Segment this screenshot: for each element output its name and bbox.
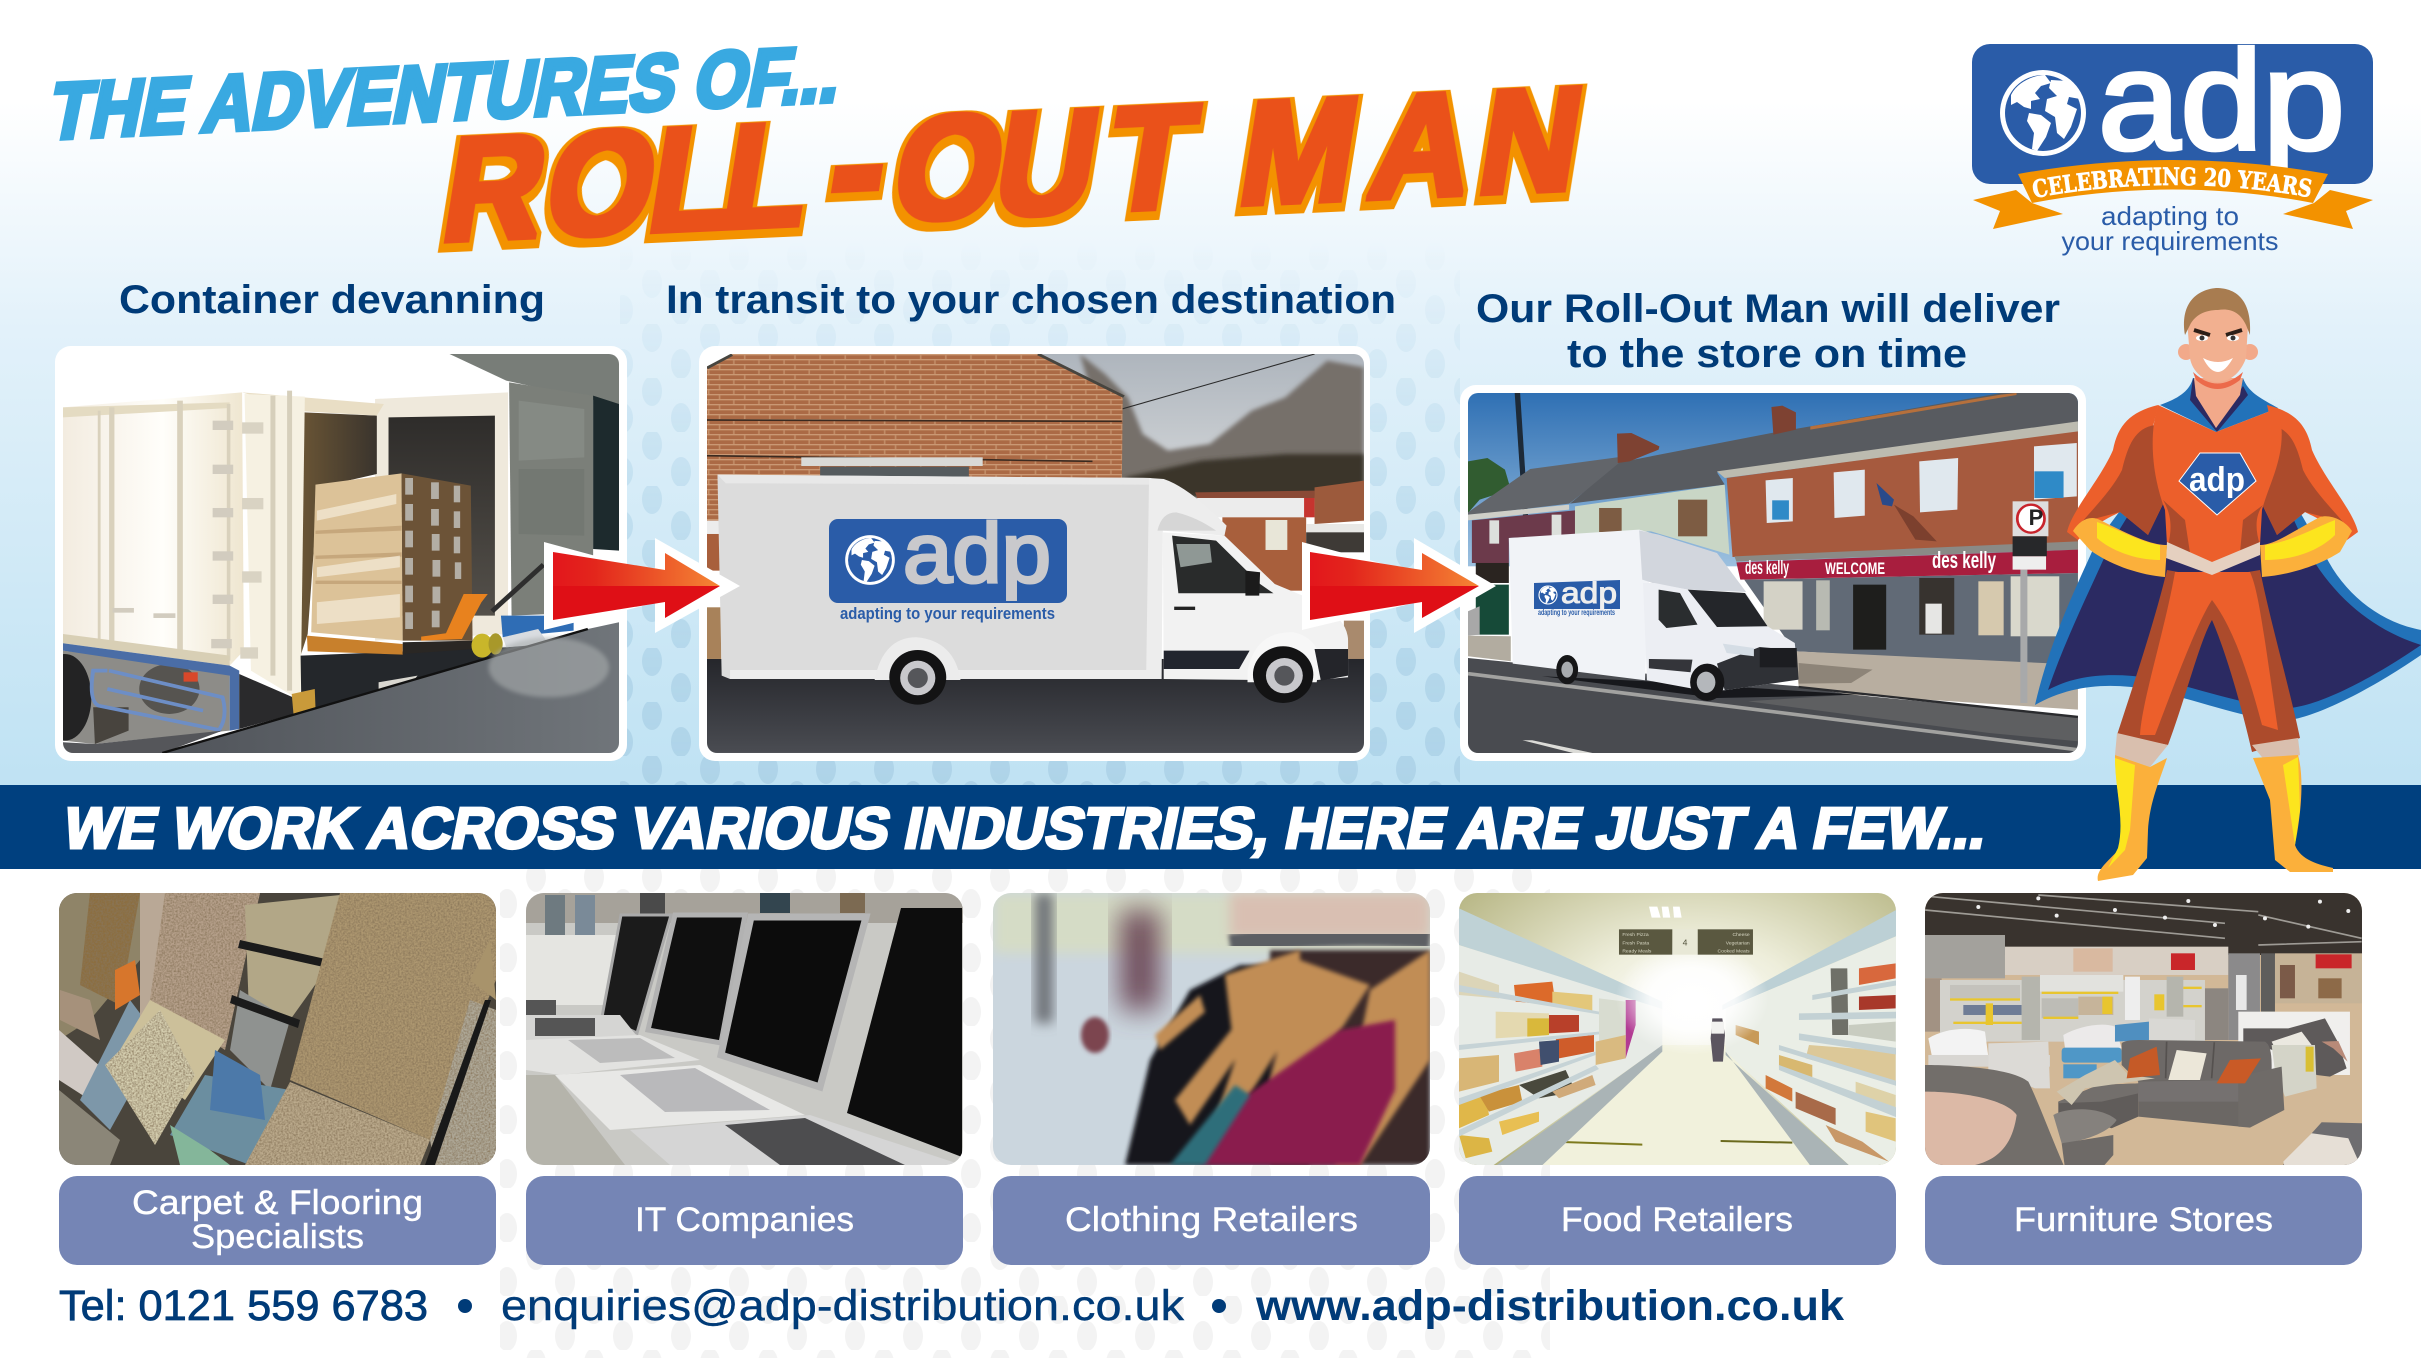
ceiling: [1459, 892, 1899, 1168]
heading: in transit: In transit to your chosen destination: [666, 278, 1396, 322]
tile: furniture photo: [1925, 892, 2365, 1168]
right fridge: [1722, 908, 1899, 1010]
right arm: [2260, 405, 2358, 540]
aisle signs: Fresh Pizza: [1622, 932, 1649, 938]
rear building: [1195, 491, 1315, 498]
heading: our roll-out man will deliver: [1476, 287, 2060, 376]
front wheel: [1253, 646, 1313, 703]
ground: [707, 659, 1364, 753]
label: food: [1459, 1176, 1896, 1265]
title: roll-out man: L: [713, 91, 822, 260]
small sample grid: [170, 895, 340, 1165]
neck: [2194, 378, 2243, 428]
belt: [2166, 542, 2260, 575]
title: roll-out man: R: [433, 103, 558, 273]
label: carpet: Specialists: [191, 1218, 364, 1256]
logo tagline: [2062, 201, 2278, 256]
banner: WE WORK ACROSS VARIOUS INDUSTRIES, HERE ARE JUST A FEW...: [58, 797, 1993, 861]
lamp post: [1515, 393, 1529, 538]
heading: our roll-out man will deliver: Our Roll-Out Man will deliver: [1476, 287, 2060, 331]
heading: container devanning: Container devanning: [119, 278, 545, 322]
label: clothing: Clothing Retailers: [1065, 1201, 1358, 1239]
sign board: [1736, 550, 2078, 580]
foreground throw: [2280, 1122, 2365, 1168]
small van logo: [1534, 577, 1620, 617]
interior: [301, 412, 377, 656]
label: IT: [526, 1176, 963, 1265]
arrow: step 2 to 3: [1302, 538, 1496, 633]
boots: [2098, 755, 2333, 881]
logo tagline: adapting to: [2101, 201, 2239, 231]
main sofa: [2057, 1040, 2284, 1128]
label: IT: IT Companies: [635, 1201, 854, 1239]
left shop: [1476, 563, 1509, 583]
tile: laptops photo: [526, 893, 963, 1165]
rear wheel: [889, 650, 946, 705]
chest emblem: [2179, 453, 2256, 515]
shop sign text: WELCOME: [1825, 559, 1885, 578]
legs: [2117, 570, 2300, 752]
road: [1468, 658, 2078, 753]
shop sign text: des kelly: [1745, 558, 1789, 579]
main roof: [1570, 393, 2078, 504]
title: roll-out man: [431, 29, 1598, 282]
dock floor: [162, 622, 619, 753]
van logo: adapting to your requirements: [840, 604, 1055, 623]
tile: carpet photo: [59, 893, 496, 1165]
truck side panel: [63, 392, 244, 666]
panel: container photo: [38, 346, 627, 761]
logo panel: [1972, 44, 2373, 184]
parking sign: [2013, 501, 2048, 703]
rear door: [245, 394, 305, 701]
open right door: [509, 382, 593, 616]
van box: [717, 475, 1151, 679]
panel: store photo: P: [2029, 505, 2043, 530]
title: roll-out man: O: [884, 82, 1016, 252]
logo: adp celebrating 20 years: [1972, 21, 2373, 256]
label: furniture: Furniture Stores: [2014, 1201, 2273, 1239]
beddings: [1928, 1018, 2195, 1088]
pallet jack: [421, 565, 574, 658]
laptops: [526, 908, 962, 1165]
rear arch: [875, 637, 960, 680]
fascia: [1717, 421, 2078, 478]
hanging clothes: [1125, 965, 1310, 1165]
contact line: enquiries@adp-distribution.co.uk: [501, 1282, 1185, 1330]
back partition + rear sofa: [2238, 1012, 2350, 1097]
contact line: [59, 1282, 1844, 1330]
title: roll-out man: U: [985, 78, 1110, 248]
pallet load: [307, 473, 474, 655]
cushions: [2127, 1047, 2160, 1078]
van logo: adp: [903, 506, 1051, 600]
shop sign text: [1745, 547, 1996, 579]
throw: [2057, 1060, 2155, 1105]
ceiling: [1925, 892, 2365, 955]
label: furniture: [1925, 1176, 2362, 1265]
shelving: [1925, 975, 2228, 1042]
armchair: [1925, 1065, 2117, 1168]
title: roll-out man: L: [639, 95, 749, 264]
ribbon: CELEBRATING 20 YEARS: [2032, 167, 2312, 198]
contact line: Tel: 0121 559 6783: [59, 1282, 428, 1330]
van logo: [829, 506, 1067, 623]
panel: store photo: [1460, 385, 2086, 761]
banner: [0, 785, 2421, 869]
shopfront: [1744, 573, 2078, 665]
sky: [1042, 354, 1364, 480]
dock roof: [450, 354, 619, 406]
contact line: www.adp-distribution.co.uk: [1255, 1282, 1844, 1330]
aisle signs: [1619, 929, 1753, 955]
aisle signs: Fresh Pasta: [1622, 940, 1649, 946]
panel: van photo: [699, 346, 1370, 761]
understructure: [239, 674, 294, 729]
brick wall: [707, 354, 1123, 527]
head: [2178, 288, 2258, 389]
bare trees: [1080, 354, 1364, 497]
title: roll-out man: O: [536, 98, 668, 268]
ribbon: [1973, 160, 2373, 229]
small van logo: adp: [1561, 577, 1617, 610]
label: carpet: Carpet & Flooring: [132, 1184, 423, 1222]
title: the adventures of: THE ADVENTURES OF...: [42, 30, 850, 157]
truck underside: [63, 651, 230, 744]
torso: [2153, 405, 2282, 565]
superhero: roll-out man: [2035, 288, 2421, 881]
awning: [1734, 541, 2078, 562]
chimneys: [1617, 433, 1659, 463]
glow: [1616, 942, 1769, 1055]
aisle signs: Ready Meals: [1622, 949, 1652, 955]
label: clothing: [993, 1176, 1430, 1265]
title: roll-out man: -: [816, 61, 903, 265]
cab: [1163, 532, 1348, 681]
left roof: [1468, 457, 1620, 516]
chest emblem: adp: [2189, 461, 2245, 499]
pavement: [1795, 651, 2078, 710]
small van logo: adapting to your requirements: [1538, 608, 1615, 617]
aisle signs: Cooked Meats: [1717, 949, 1750, 955]
title: roll-out man: T: [1097, 74, 1207, 243]
left fridge: [1459, 908, 1662, 1010]
arrow: step 1 to 2: [544, 538, 740, 633]
brick: [1727, 431, 2078, 557]
title: roll-out man: N: [1469, 56, 1594, 226]
magenta building: [1472, 510, 1575, 563]
fairing: [1146, 478, 1227, 679]
floor: [1925, 892, 2365, 1168]
aisle signs: Vegetarian: [1726, 940, 1750, 946]
cream building: [1575, 485, 1729, 555]
title: roll-out man: A: [1360, 61, 1485, 231]
aisle signs: 4: [1683, 938, 1688, 948]
van: [1509, 530, 1799, 701]
tile: clothing photo: [993, 893, 1430, 1165]
tile: supermarket photo: [1459, 892, 1899, 1168]
knee bands: [2115, 733, 2300, 767]
label: carpet: [59, 1176, 496, 1265]
heading: our roll-out man will deliver: to the store on time: [1567, 332, 1967, 376]
logo wordmark: adp: [2098, 21, 2345, 179]
cape: [2035, 470, 2421, 720]
logo tagline: your requirements: [2062, 226, 2278, 256]
collar: [2160, 378, 2278, 432]
aisle signs: Cheese: [1732, 932, 1750, 938]
label: food: Food Retailers: [1561, 1201, 1793, 1239]
floor: [1532, 1045, 1812, 1168]
back wall: [1925, 935, 2005, 978]
gloves: [2073, 516, 2352, 577]
title: roll-out man: M: [1230, 66, 1369, 237]
logo globe: [2000, 70, 2086, 156]
left arm: [2067, 405, 2165, 540]
far container wall: [375, 392, 508, 641]
shop sign text: des kelly: [1932, 547, 1996, 573]
shopper: [1711, 1018, 1725, 1062]
